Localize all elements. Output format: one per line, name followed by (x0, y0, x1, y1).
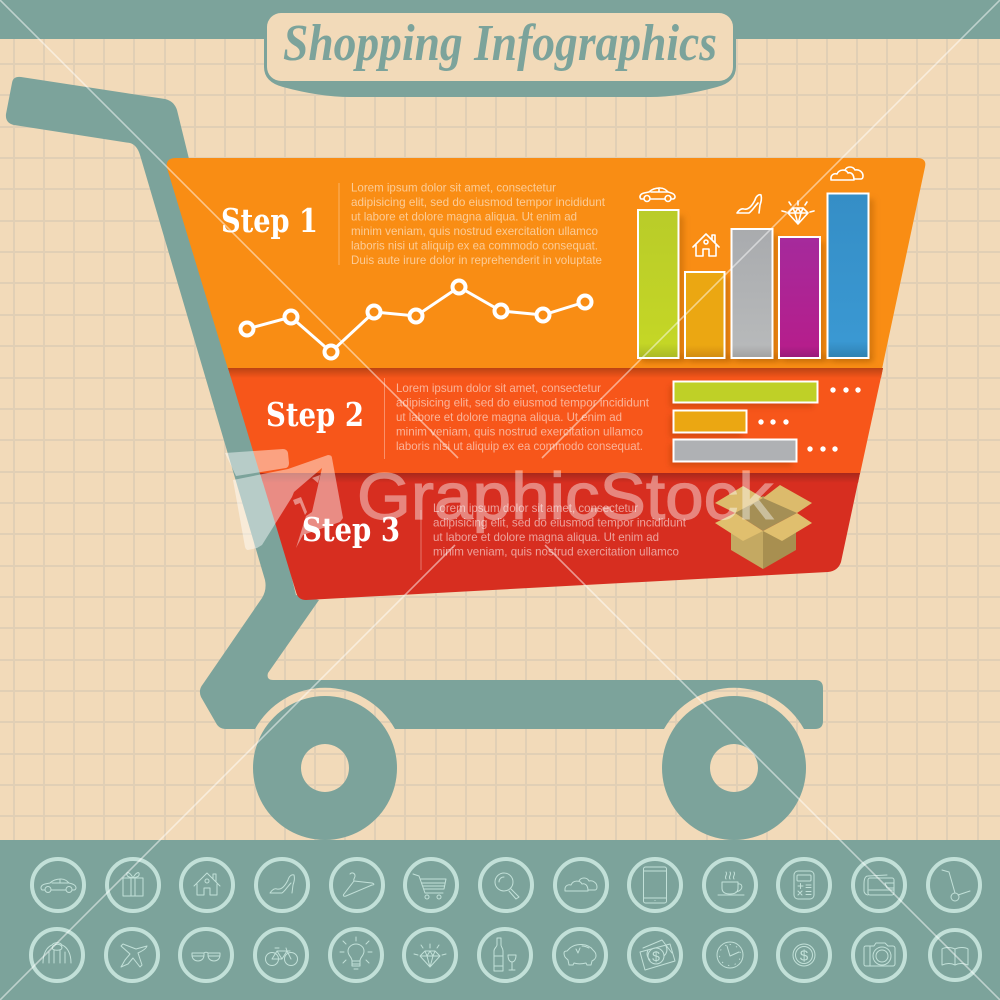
icon row 1 (32, 859, 980, 911)
panel: step 1 (167, 158, 925, 369)
dots (758, 387, 861, 452)
step 3 text: adipisicing elit, sed do eiusmod tempor incididunt (433, 516, 687, 530)
icon: piggy bank (554, 929, 606, 981)
step 1 text: laboris nisi ut aliquip ex ea commodo consequat. (351, 238, 598, 252)
icon: book (930, 930, 980, 980)
step 1 text: Duis aute irure dolor in reprehenderit in voluptate (351, 253, 602, 267)
icon: car (640, 188, 675, 202)
icon: house (693, 234, 719, 256)
step 2 text: Lorem ipsum dolor sit amet, consectetur (396, 381, 601, 395)
icon: cloud (831, 167, 863, 180)
icon: cardboard box (715, 485, 812, 569)
icon: hanger (331, 859, 383, 911)
step 1 heading: Step 1 (221, 201, 318, 240)
step 1 divider (338, 183, 340, 265)
top band (0, 0, 1000, 39)
icon: calculator (778, 859, 830, 911)
step 3 text: ut labore et dolore magna aliqua. Ut enim ad (433, 530, 659, 544)
icon: cart (405, 859, 457, 911)
title plaque (264, 13, 736, 97)
step 1 text: Lorem ipsum dolor sit amet, consectetur (351, 180, 556, 194)
step 3 text (433, 501, 687, 558)
shopping cart frame (6, 77, 823, 729)
step 2 text: laboris nisi ut aliquip ex ea commodo consequat. (396, 439, 643, 453)
icon: hand truck (928, 859, 980, 911)
watermark wordmark: GraphicStock (357, 459, 774, 533)
icon: diamond (782, 201, 814, 224)
bottom band (0, 840, 1000, 1000)
icon: dollar coin (778, 929, 830, 981)
step 2 divider (384, 378, 385, 459)
icon: shoe (256, 859, 308, 911)
icon: magnifier (480, 859, 532, 911)
panel: step 3 (260, 473, 860, 600)
icon: shoe (737, 195, 761, 213)
step 3 heading: Step 3 (302, 510, 400, 549)
step 3 text: Lorem ipsum dolor sit amet, consectetur (433, 501, 638, 515)
step 1 text: adipisicing elit, sed do eiusmod tempor incididunt (351, 195, 606, 209)
panel: step 2 (228, 368, 883, 474)
icon: wine bottle and glass (479, 929, 531, 981)
icon: camera (853, 929, 905, 981)
step 3 text: minim veniam, quis nostrud exercitation ullamco (433, 544, 679, 558)
line chart (240, 280, 592, 358)
step 2 text: minim veniam, quis nostrud exercitation ullamco (396, 424, 643, 438)
icon row 2 (31, 929, 980, 981)
icon: car (32, 859, 84, 911)
step 2 text: ut labore et dolore magna aliqua. Ut enim ad (396, 410, 622, 424)
title: Shopping Infographics (283, 15, 717, 72)
left wheel (253, 696, 397, 840)
icon: coffee cup (704, 859, 756, 911)
icon: dollar coin: $ (800, 948, 809, 964)
icon: house (181, 859, 233, 911)
icon: glasses (180, 929, 232, 981)
step 2 heading: Step 2 (266, 395, 364, 434)
horizontal bar chart (670, 382, 861, 466)
step 1 text: minim veniam, quis nostrud exercitation ullamco (351, 224, 598, 238)
step 3 divider (420, 510, 422, 570)
icon: diamond (404, 929, 456, 981)
step 1 text (351, 180, 606, 267)
bar chart (638, 167, 874, 362)
icon: hoodie (31, 929, 83, 981)
icon: tablet (629, 859, 681, 911)
icon: clock (704, 929, 756, 981)
step 1 text: ut labore et dolore magna aliqua. Ut enim ad (351, 210, 577, 224)
icon: cloud (555, 859, 607, 911)
icon: airplane (106, 929, 158, 981)
icon: money: $ (652, 948, 660, 964)
step 2 text: adipisicing elit, sed do eiusmod tempor incididunt (396, 396, 650, 410)
icon: bicycle (255, 929, 307, 981)
icon: money (629, 929, 681, 981)
right wheel (662, 696, 806, 840)
icon: gift (107, 859, 159, 911)
icon: light bulb (330, 929, 382, 981)
step 2 text (396, 381, 650, 453)
watermark logo (225, 449, 343, 550)
icon: wallet (853, 859, 905, 911)
